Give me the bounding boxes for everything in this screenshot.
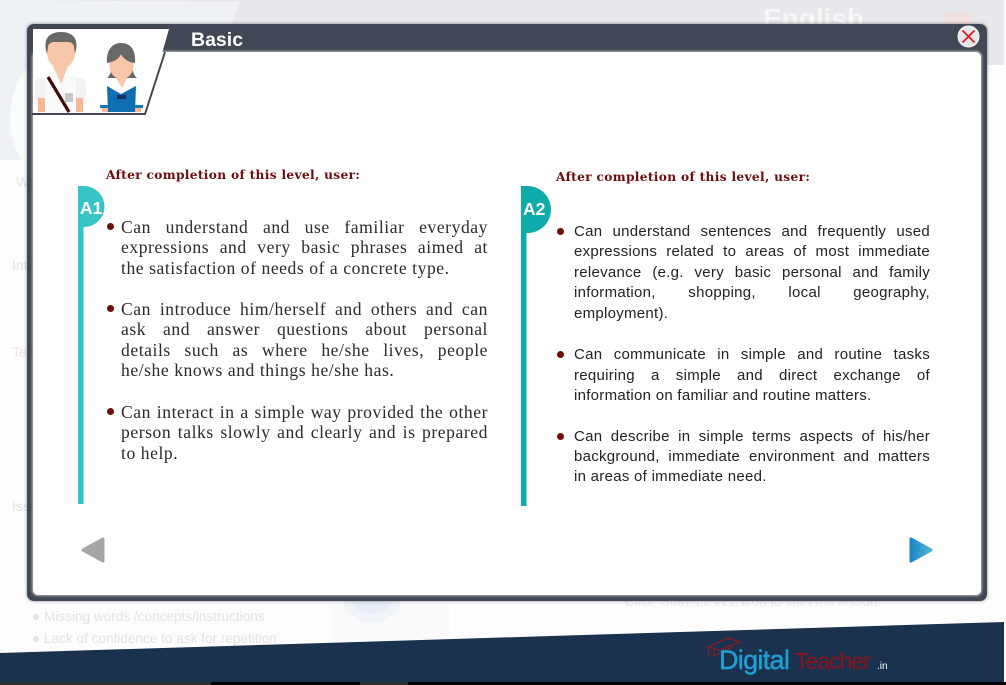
background faded list <box>33 609 277 646</box>
footer band <box>0 622 1006 685</box>
text: Can communicate in simple and routine tasks <box>574 346 930 363</box>
background faded list: Lack of confidence to ask for repetition <box>44 631 277 646</box>
background faded list: Missing words /concepts/instructions <box>44 609 265 624</box>
background faded labels: Int <box>12 257 28 273</box>
icon: student characters <box>32 29 169 115</box>
background faded labels: Iss <box>12 498 30 514</box>
icon: boy <box>35 32 86 112</box>
arrow: next <box>910 538 933 563</box>
text: in areas of immediate need. <box>574 468 767 485</box>
arrow: previous <box>82 537 104 562</box>
text: Can understand and use familiar everyday <box>121 217 488 237</box>
A2 badge and rail: A2 <box>523 199 546 219</box>
A2 bullet list <box>557 228 564 440</box>
title: Basic: Basic <box>191 29 243 51</box>
logo suffix: .in <box>877 661 888 672</box>
panel: A1 level <box>78 168 360 504</box>
background faded labels: Te <box>12 344 27 360</box>
text: background, immediate environment and matters <box>574 448 930 465</box>
text: Can introduce him/herself and others and can <box>121 299 488 319</box>
text: details such as where he/she lives, people <box>121 340 488 360</box>
background faded labels: W <box>16 174 29 190</box>
icon: graduation cap <box>706 637 742 657</box>
heading A2: After completion of this level, user: <box>556 170 810 184</box>
text: Can understand sentences and frequently used <box>574 223 930 240</box>
close button <box>958 26 980 48</box>
text: requiring a simple and direct exchange of <box>574 367 930 384</box>
text: employment). <box>574 305 668 322</box>
text: ask and answer questions about personal <box>121 319 488 339</box>
A1 badge and rail <box>78 186 104 504</box>
text: expressions related to areas of most immediate <box>574 243 930 260</box>
text: to help. <box>121 443 178 463</box>
A1 badge and rail: A1 <box>80 198 103 218</box>
text: the satisfaction of needs of a concrete type. <box>121 258 450 278</box>
text: relevance (e.g. very basic personal and family <box>574 264 930 281</box>
text: expressions and very basic phrases aimed at <box>121 237 488 257</box>
A1 bullet list <box>107 223 114 415</box>
dialog content panel <box>33 52 981 595</box>
background title fragment: English <box>763 3 864 34</box>
background faded instruction: Click 'Start' LEVEL icon to start the lesson. <box>625 594 881 609</box>
A2 badge and rail <box>521 186 551 506</box>
text: Can interact in a simple way provided the other <box>121 402 488 422</box>
text: information, shopping, local geography, <box>574 284 930 301</box>
logo: Digital Teacher <box>706 637 888 675</box>
logo word: Teacher: Teacher <box>795 648 870 674</box>
background faded labels <box>12 174 30 514</box>
heading A1: After completion of this level, user: <box>106 168 360 182</box>
text: Can describe in simple terms aspects of his/her <box>574 428 930 445</box>
panel: A2 level <box>521 170 810 506</box>
icon: girl <box>100 43 143 112</box>
background home icon <box>942 12 972 32</box>
logo word: Digital: Digital <box>719 645 789 675</box>
text: he/she knows and things he/she has. <box>121 360 394 380</box>
text: information on familiar and routine matters. <box>574 387 871 404</box>
text: person talks slowly and clearly and is prepared <box>121 422 488 442</box>
